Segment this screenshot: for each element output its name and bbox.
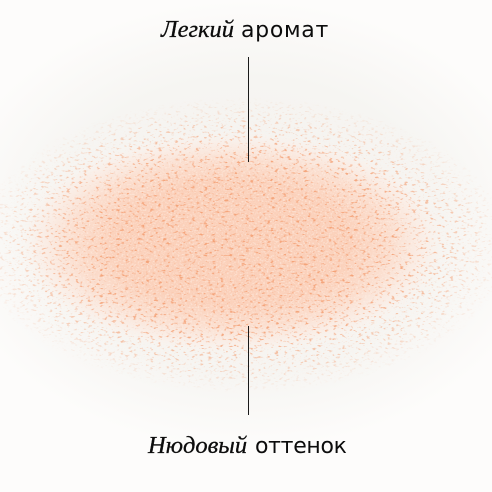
top heading: аромат (241, 18, 329, 43)
top heading: Легкий (161, 16, 234, 43)
bottom heading (148, 432, 347, 459)
top heading (160, 16, 329, 43)
powder swatch (0, 80, 492, 392)
bottom heading: Нюдовый (148, 432, 247, 459)
bottom connector line (248, 326, 249, 415)
top connector line (248, 57, 249, 162)
bottom heading: оттенок (255, 434, 347, 459)
